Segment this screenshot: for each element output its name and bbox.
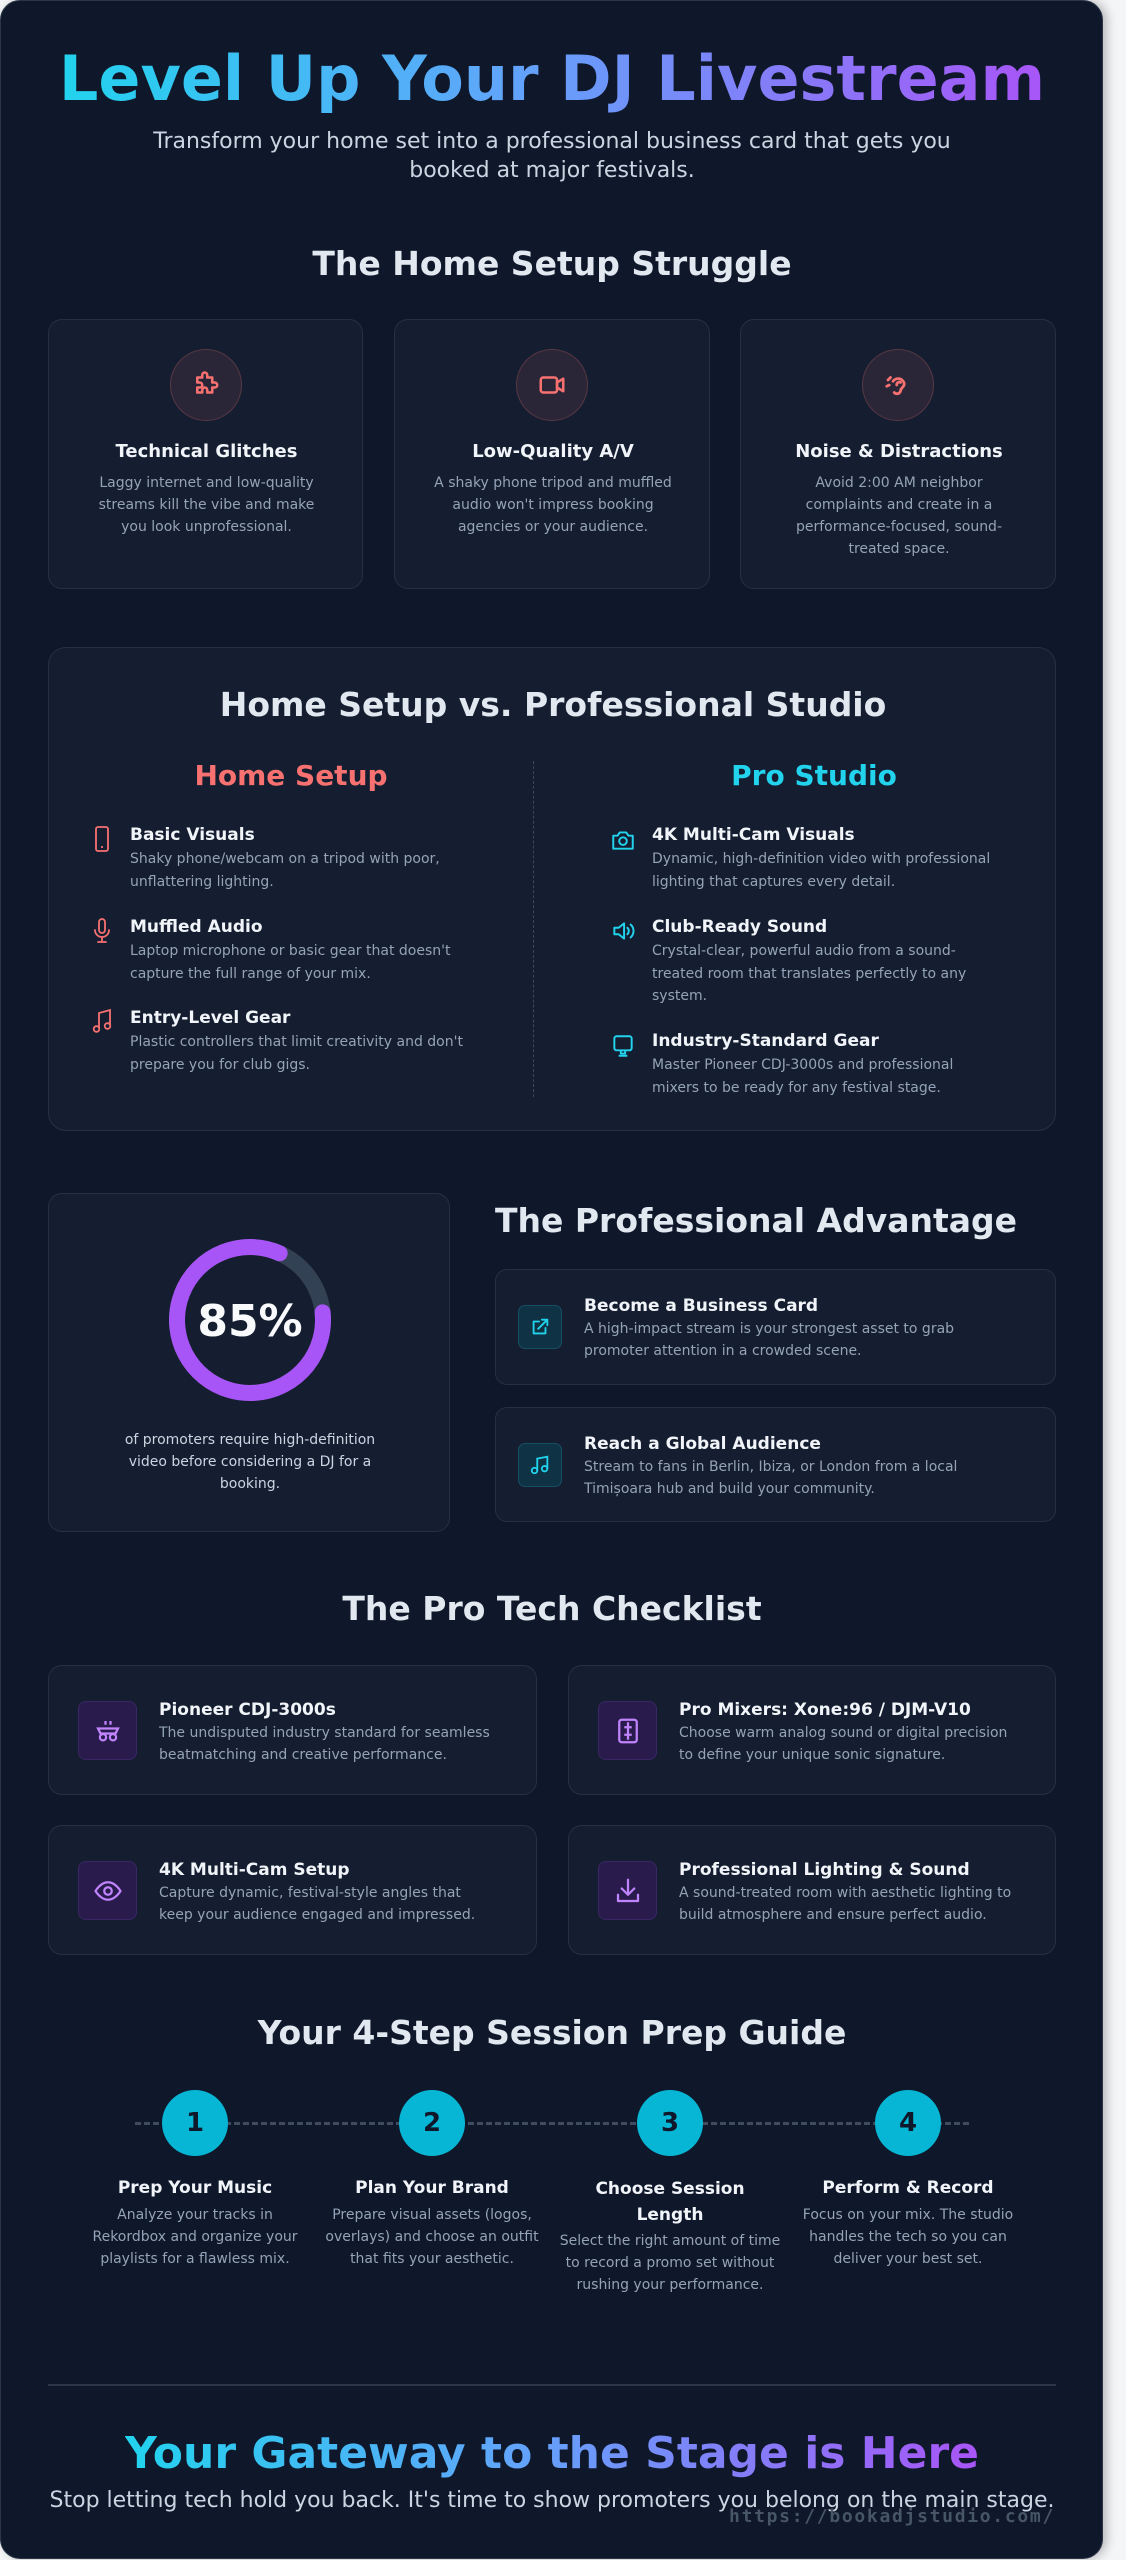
panel: Reach a Global Audience: Timișoara hub and build your community. — [584, 1481, 875, 1497]
item: 4K Multi-Cam Visuals — [612, 825, 990, 890]
item: Entry-Level Gear — [92, 1008, 463, 1072]
item: Muffled Audio: capture the full range of your mix. — [130, 966, 371, 982]
step 4: 4 — [899, 2108, 917, 2138]
card text: Laggy internet and low-quality — [99, 475, 314, 491]
item: Club-Ready Sound: system. — [652, 988, 707, 1004]
text: deliver your best set. — [834, 2251, 982, 2267]
panel: Noise & Distractions — [740, 319, 1056, 589]
item: Industry-Standard Gear: Industry-Standard Gear — [652, 1031, 879, 1051]
chart: donut ring: 85% — [197, 1296, 303, 1347]
panel: Lighting & Sound: Professional Lighting & Sound — [679, 1860, 970, 1880]
heading: The Home Setup Struggle: The Home Setup Struggle — [312, 244, 792, 283]
text: that fits your aesthetic. — [350, 2251, 514, 2267]
item: Basic Visuals: Basic Visuals — [130, 825, 255, 845]
icon: video camera — [516, 349, 588, 421]
panel: comparison — [48, 647, 1056, 1131]
icon: speaker — [613, 922, 634, 940]
item: Entry-Level Gear: prepare you for club gigs. — [130, 1056, 310, 1072]
step 3: Choose Session — [595, 2179, 745, 2199]
item: Basic Visuals — [95, 825, 440, 890]
step 3: 3 — [661, 2108, 679, 2138]
chart: donut ring — [169, 1239, 331, 1401]
panel: 4K Multi-Cam Setup — [48, 1825, 537, 1955]
subtitle: booked at major festivals. — [409, 158, 695, 183]
panel: stat 85% — [48, 1193, 450, 1532]
panel: Reach a Global Audience: Stream to fans in Berlin, Ibiza, or London from a local — [584, 1459, 957, 1475]
stat caption: booking. — [220, 1476, 280, 1492]
card text — [796, 475, 1002, 557]
step 1: Prep Your Music — [118, 2178, 272, 2198]
column heading: Pro Studio: Pro Studio — [731, 759, 897, 792]
item: Muffled Audio: Muffled Audio — [130, 917, 263, 937]
icon: microphone — [94, 918, 110, 943]
stat caption: video before considering a DJ for a — [129, 1454, 371, 1470]
panel: Pro Mixers — [568, 1665, 1056, 1795]
step 3: Length — [637, 2205, 703, 2225]
step 2: Plan Your Brand — [355, 2178, 509, 2198]
item: 4K Multi-Cam Visuals: 4K Multi-Cam Visuals — [652, 825, 855, 845]
panel: Become a Business Card: Become a Business Card — [584, 1296, 818, 1316]
card text: audio won't impress booking — [452, 497, 654, 513]
icon: camera — [612, 832, 634, 850]
card text — [434, 475, 672, 535]
panel: Become a Business Card: A high-impact stream is your strongest asset to grab — [584, 1321, 954, 1337]
step 4: Focus on your mix. The studio — [803, 2207, 1013, 2223]
panel: Reach a Global Audience: Reach a Global Audience — [584, 1434, 821, 1454]
icon: music note — [518, 1443, 562, 1487]
panel: Pro Mixers: Choose warm analog sound or digital precision — [679, 1725, 1007, 1741]
text: Rekordbox and organize your — [92, 2229, 298, 2245]
step 4 — [803, 2090, 1013, 2267]
text: playlists for a flawless mix. — [100, 2251, 290, 2267]
subtitle: Transform your home set into a professional business card that gets you — [153, 129, 951, 154]
panel: Lighting & Sound: A sound-treated room with aesthetic lighting to — [679, 1885, 1011, 1901]
icon: puzzle — [170, 349, 242, 421]
comparison heading: Home Setup vs. Professional Studio — [220, 685, 886, 724]
panel: Pro Mixers: Pro Mixers: Xone:96 / DJM-V10 — [679, 1700, 971, 1720]
url: https://bookadjstudio.com/ — [729, 2506, 1055, 2527]
icon: mixer — [598, 1701, 657, 1760]
item: Club-Ready Sound: treated room that translates perfectly to any — [652, 966, 966, 982]
step 3: Select the right amount of time — [560, 2233, 780, 2249]
panel: Pioneer CDJ-3000s: The undisputed industry standard for seamless — [159, 1725, 490, 1741]
card text — [99, 475, 314, 535]
icon: external link — [518, 1305, 562, 1349]
step 2: 2 — [423, 2108, 441, 2138]
text: to record a promo set without — [566, 2255, 774, 2271]
heading: The Pro Tech Checklist: The Pro Tech Checklist — [342, 1589, 762, 1628]
item: Industry-Standard Gear: mixers to be ready for any festival stage. — [652, 1080, 941, 1096]
step 1 — [92, 2090, 298, 2267]
card title: Low-Quality A/V — [472, 441, 634, 462]
footer text: Stop letting tech hold you back. It's time to show promoters you belong on the main stage. — [50, 2488, 1054, 2513]
step 4: Perform & Record — [822, 2178, 994, 2198]
item: Club-Ready Sound: Club-Ready Sound — [652, 917, 827, 937]
card title: Technical Glitches — [116, 441, 297, 462]
item: Muffled Audio: Laptop microphone or basic gear that doesn't — [130, 943, 450, 959]
heading: 4-Step guide: Your 4-Step Session Prep Guide — [258, 2013, 846, 2052]
panel: Pioneer CDJ-3000s — [48, 1665, 537, 1795]
column heading: Home Setup: Home Setup — [194, 759, 388, 792]
heading: The Professional Advantage: The Professional Advantage — [495, 1201, 1017, 1240]
card text: Avoid 2:00 AM neighbor — [815, 475, 983, 491]
stat caption: of promoters require high-definition — [125, 1432, 375, 1448]
panel: Technical Glitches — [48, 319, 363, 589]
subtitle — [153, 129, 951, 183]
item: Basic Visuals: unflattering lighting. — [130, 874, 274, 890]
card title: Noise & Distractions — [795, 441, 1003, 462]
panel: Lighting & Sound: build atmosphere and ensure perfect audio. — [679, 1907, 987, 1923]
panel: 4K Multi-Cam Setup: Capture dynamic, festival-style angles that — [159, 1885, 461, 1901]
icon: decks — [78, 1701, 137, 1760]
item: 4K Multi-Cam Visuals: Dynamic, high-definition video with professional — [652, 851, 990, 867]
item: 4K Multi-Cam Visuals: lighting that captures every detail. — [652, 874, 895, 890]
card text: complaints and create in a — [806, 497, 992, 513]
text: rushing your performance. — [577, 2277, 763, 2293]
panel: Pro Mixers: to define your unique sonic signature. — [679, 1747, 945, 1763]
icon: monitor — [613, 1035, 633, 1057]
icon: phone — [95, 826, 109, 852]
item: Muffled Audio — [94, 917, 450, 982]
panel: Lighting & Sound — [568, 1825, 1056, 1955]
panel: 4K Multi-Cam Setup: keep your audience engaged and impressed. — [159, 1907, 475, 1923]
item: Club-Ready Sound — [613, 917, 966, 1004]
title: Level Up Your DJ Livestream — [59, 42, 1045, 115]
text: overlays) and choose an outfit — [325, 2229, 539, 2245]
panel: Low-Quality A/V — [394, 319, 710, 589]
step 2: Prepare visual assets (logos, — [332, 2207, 532, 2223]
panel: Pioneer CDJ-3000s: beatmatching and creative performance. — [159, 1747, 447, 1763]
panel: Pioneer CDJ-3000s: Pioneer CDJ-3000s — [159, 1700, 336, 1720]
stat caption — [125, 1432, 375, 1492]
card text: agencies or your audience. — [458, 519, 648, 535]
item: Entry-Level Gear: Plastic controllers that limit creativity and don't — [130, 1034, 463, 1050]
footer heading: Your Gateway to the Stage is Here — [125, 2428, 979, 2479]
panel: Reach a Global Audience — [495, 1407, 1056, 1522]
panel: 4K Multi-Cam Setup: 4K Multi-Cam Setup — [159, 1860, 350, 1880]
item: Basic Visuals: Shaky phone/webcam on a tripod with poor, — [130, 851, 440, 867]
step 1: 1 — [186, 2108, 204, 2138]
icon: download — [598, 1861, 657, 1920]
item: Club-Ready Sound: Crystal-clear, powerful audio from a sound- — [652, 943, 956, 959]
item: Industry-Standard Gear: Master Pioneer CDJ-3000s and professional — [652, 1057, 953, 1073]
icon: eye — [78, 1861, 137, 1920]
step 1: Analyze your tracks in — [117, 2207, 273, 2223]
card text: treated space. — [848, 541, 950, 557]
item: Entry-Level Gear: Entry-Level Gear — [130, 1008, 290, 1028]
text: handles the tech so you can — [809, 2229, 1007, 2245]
card text: A shaky phone tripod and muffled — [434, 475, 672, 491]
icon: ear — [862, 349, 934, 421]
icon: music note — [92, 1008, 112, 1033]
item: Industry-Standard Gear — [613, 1031, 953, 1096]
panel: Become a Business Card — [495, 1269, 1056, 1385]
step 3 — [560, 2090, 780, 2293]
panel: Become a Business Card: promoter attention in a crowded scene. — [584, 1343, 862, 1359]
card text: streams kill the vibe and make — [99, 497, 314, 513]
card text: performance-focused, sound- — [796, 519, 1002, 535]
card text: you look unprofessional. — [121, 519, 292, 535]
step 2 — [325, 2090, 539, 2267]
